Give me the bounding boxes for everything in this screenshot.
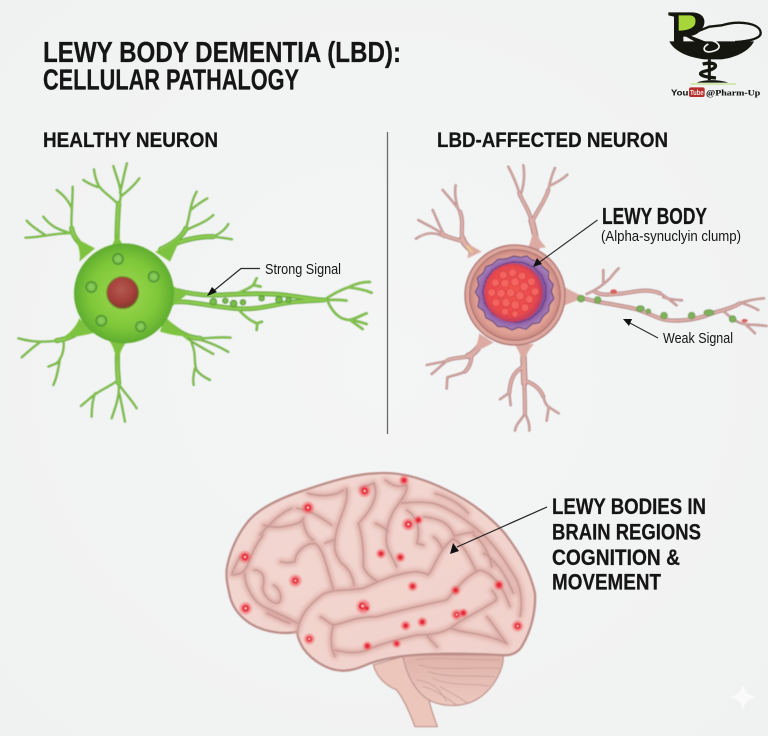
callout: Lewy bodies in brain regions: [450, 494, 706, 594]
callout: strong signal: Strong Signal: [265, 261, 341, 278]
youtube handle text: [671, 87, 761, 97]
soma: [74, 243, 174, 343]
axon amyloid deposits: [577, 295, 736, 322]
callout: weak signal: Weak Signal: [663, 330, 733, 347]
icon: green R: [668, 12, 708, 43]
callout: Lewy body: LEWY BODY: [602, 203, 707, 229]
youtube handle text: You: [671, 88, 688, 97]
organelles: [86, 254, 159, 332]
callout: Lewy bodies in brain regions: MOVEMENT: [552, 570, 661, 594]
axon vesicles: [210, 296, 291, 307]
sulci: [232, 480, 521, 657]
soma with membrane: [465, 245, 565, 345]
callout: strong signal: [207, 261, 341, 296]
youtube handle text: Tube: [690, 88, 704, 97]
title: CELLULAR PATHALOGY: [43, 64, 299, 96]
callout: Lewy body: [533, 203, 741, 267]
title: [43, 37, 401, 96]
heading: LBD-affected neuron: LBD-AFFECTED NEURON: [437, 129, 668, 152]
title: LEWY BODY DEMENTIA (LBD):: [43, 37, 401, 69]
icon: sparkle watermark: [730, 684, 756, 710]
callout: Lewy bodies in brain regions: LEWY BODIES IN: [552, 494, 706, 519]
dendrites and axon: [416, 165, 767, 431]
callout: Lewy bodies in brain regions: BRAIN REGIONS: [552, 520, 701, 544]
red deposits: [610, 289, 748, 322]
lewy body: red clump: [484, 263, 543, 322]
Lewy body spots: [238, 475, 524, 651]
brainstem: [373, 657, 437, 727]
icon: serpent and bowl: [669, 23, 761, 84]
panel: LBD-affected neuron illustration: [416, 165, 767, 431]
lewy body: purple halo: [475, 256, 554, 330]
logo: Rx bowl of hygieia with YouTube handle: [668, 12, 761, 97]
callout: weak signal: [623, 319, 733, 347]
neuron dendrites and axon: [18, 163, 372, 422]
panel: brain illustration: [226, 473, 535, 727]
callout: Lewy bodies in brain regions: COGNITION &: [552, 545, 680, 570]
panel: healthy neuron illustration: [18, 163, 372, 422]
cerebellum: [403, 655, 503, 705]
heading: healthy neuron: HEALTHY NEURON: [43, 129, 218, 152]
cerebrum: [226, 473, 535, 671]
callout: Lewy body: (Alpha-synuclyin clump): [601, 228, 741, 245]
nucleus: [107, 277, 139, 309]
youtube handle text: @Pharm-Up: [706, 88, 761, 97]
